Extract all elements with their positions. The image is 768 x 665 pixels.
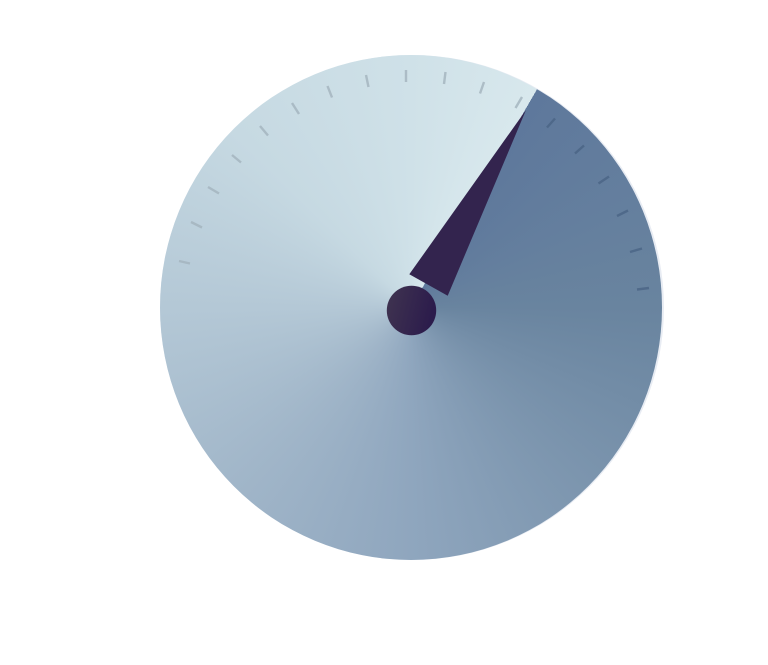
tick marks <box>179 70 649 290</box>
gauge needle <box>409 110 526 296</box>
gauge dial <box>160 55 662 560</box>
needle hub <box>387 286 436 335</box>
dial outer halo <box>160 55 664 560</box>
